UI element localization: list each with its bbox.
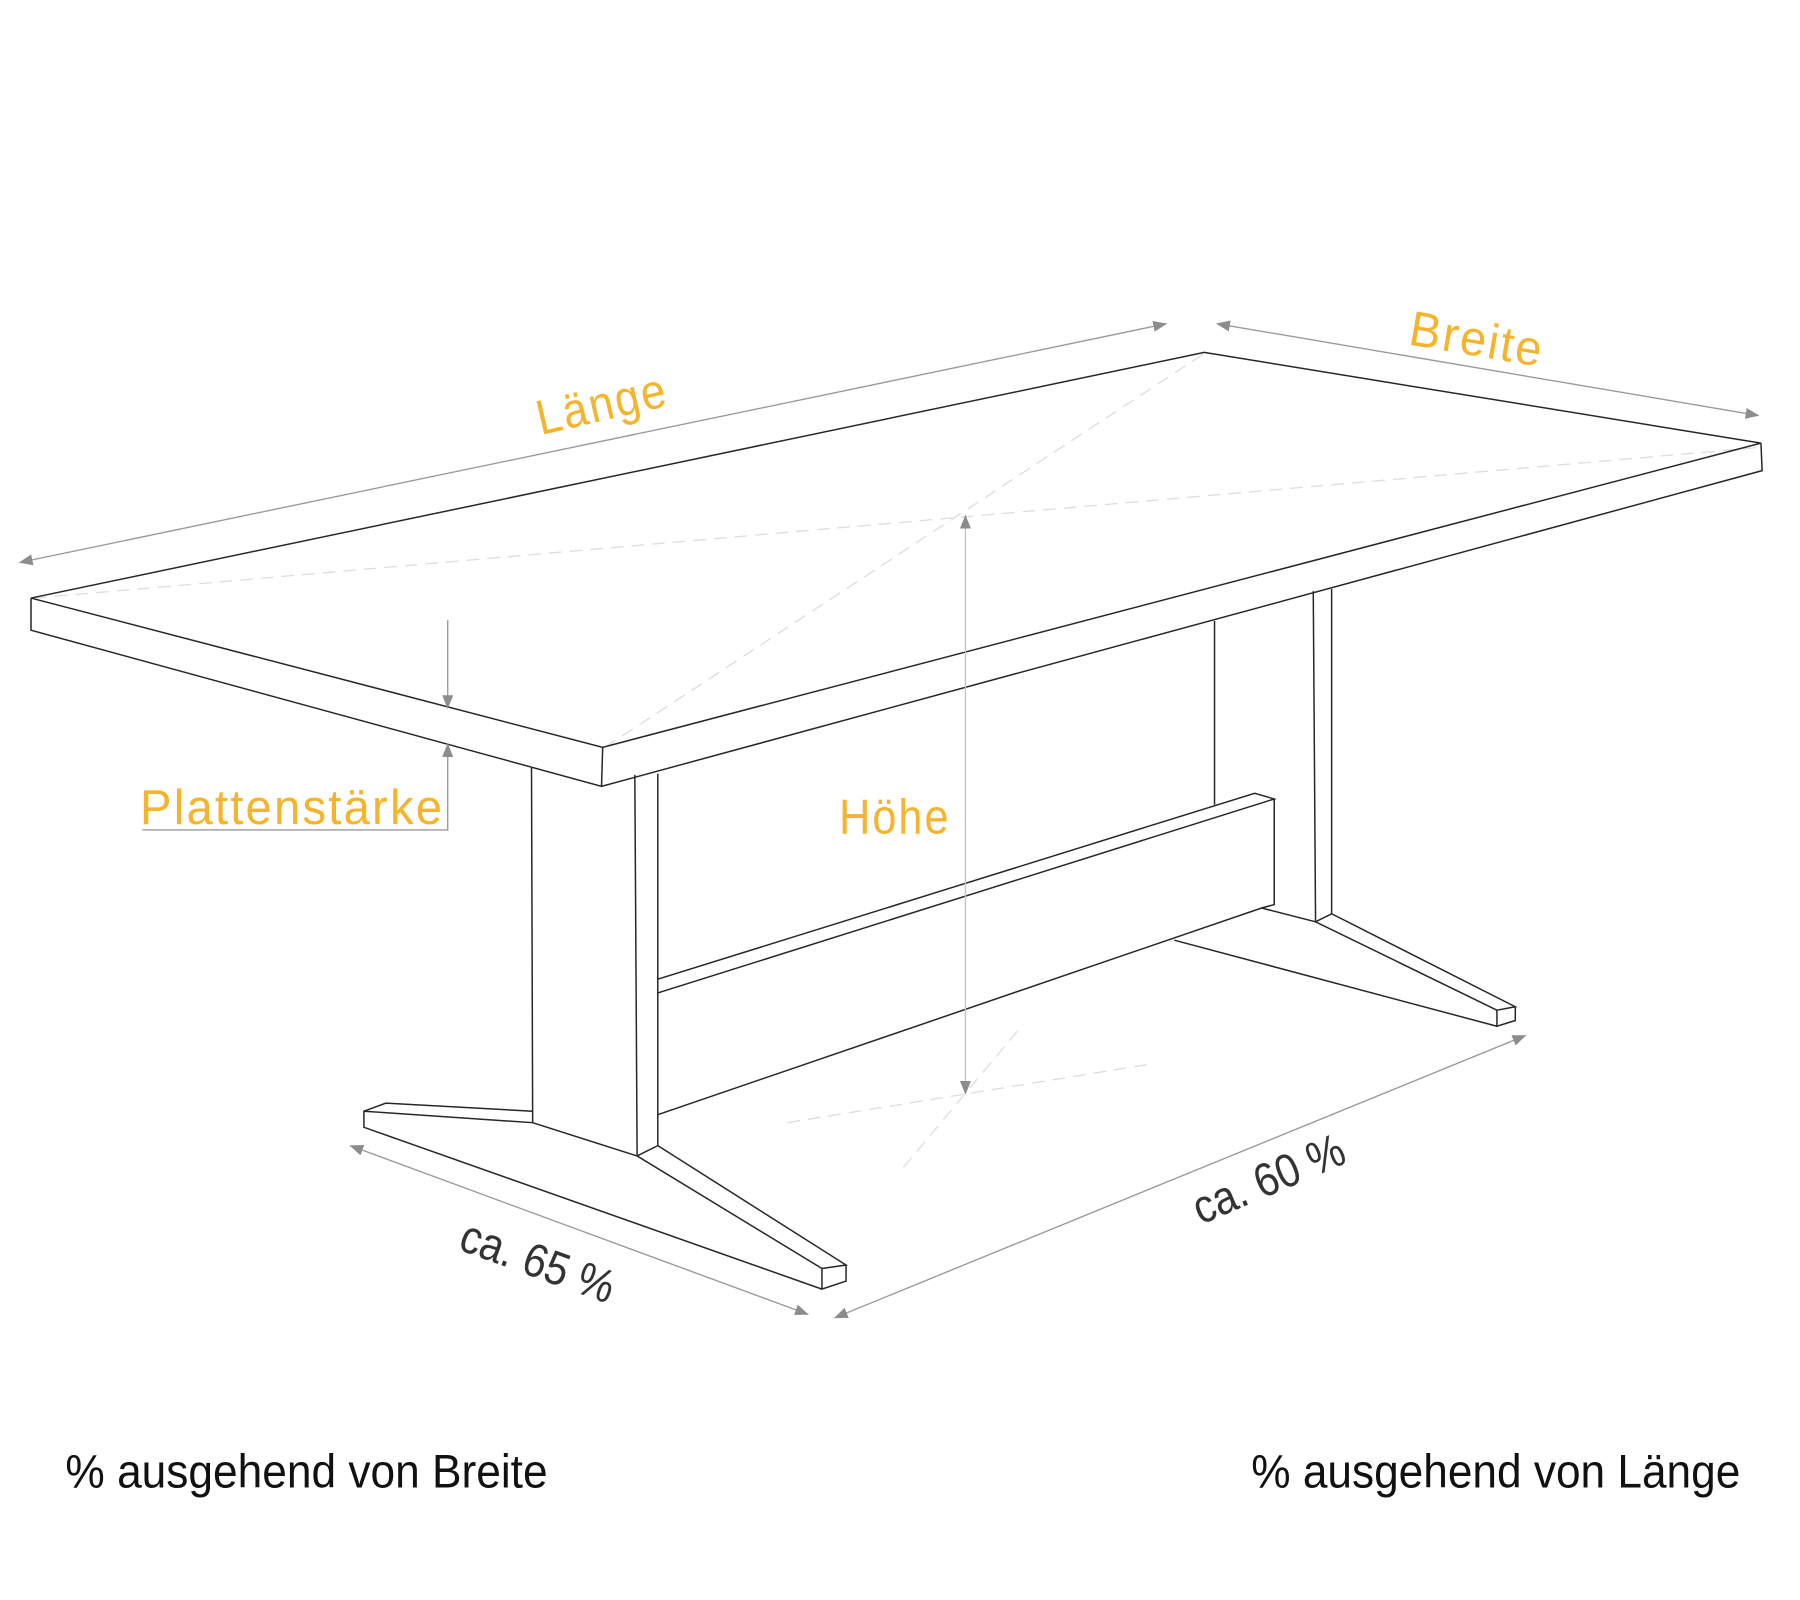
cross beam [658,793,1274,1115]
rear foot [1174,908,1515,1026]
arrow: top thickness lower with leader [142,744,448,830]
arrow: height [964,515,966,1094]
rear leg [1215,589,1332,922]
front foot [364,1103,846,1289]
front leg [532,768,658,1156]
diagonal guide lines on table top [34,354,1756,747]
diagonal guide lines on floor [788,1027,1150,1167]
arrow: width [1217,324,1759,416]
label: ca. 65 %: ca. 65 % [453,1209,623,1313]
arrow: length [20,324,1166,562]
arrow: leg spacing 60 percent [835,1035,1526,1318]
table top [31,352,1762,786]
label: Plattenstärke: Plattenstärke [140,780,444,835]
note: percent from length: % ausgehend von Länge [1251,1445,1740,1498]
arrow: foot length 65 percent [350,1146,808,1314]
label: ca. 60 %: ca. 60 % [1184,1122,1353,1234]
arrow: top thickness upper [447,620,449,708]
label: Höhe: Höhe [839,789,951,844]
label: Länge: Länge [531,362,673,446]
note: percent from width: % ausgehend von Breite [65,1445,548,1498]
label: Breite: Breite [1406,301,1548,378]
